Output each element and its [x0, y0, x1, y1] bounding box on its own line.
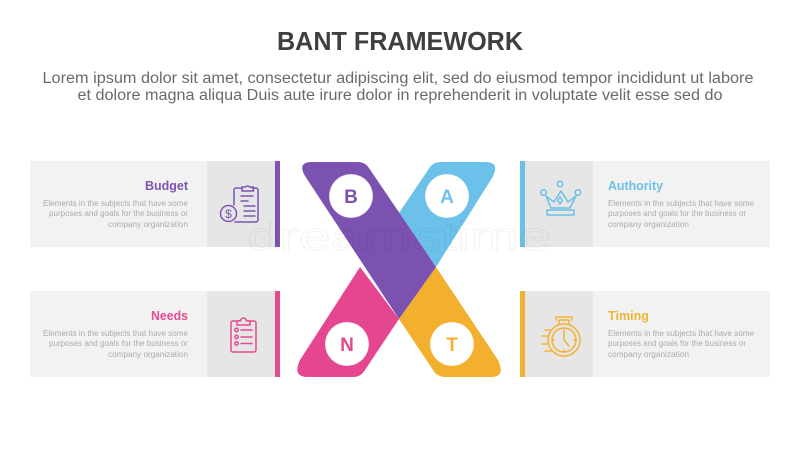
- badge: T: [430, 322, 474, 366]
- badge: B: B: [344, 187, 358, 208]
- subtitle text: Lorem ipsum dolor sit amet, consectetur adipiscing elit, sed do eiusmod tempor incididunt ut labore: [42, 70, 754, 87]
- icon: checklist clipboard: [231, 318, 256, 352]
- badge: T: T: [446, 335, 458, 356]
- badge: A: A: [440, 187, 454, 208]
- band: A blue: [399, 162, 495, 267]
- description: needs: Elements in the subjects that have some: [43, 328, 188, 338]
- description: timing: company organization: [608, 349, 689, 359]
- description: authority: company organization: [608, 219, 689, 229]
- description: needs: company organization: [108, 349, 188, 359]
- badge: A: [425, 174, 469, 218]
- heading: authority: Authority: [608, 179, 663, 193]
- panel: needs: [30, 291, 280, 377]
- description: timing: purposes and goals for the business or: [608, 338, 746, 348]
- band: T yellow: [399, 267, 501, 377]
- subtitle text: et dolore magna aliqua Duis aute irure dolor in reprehenderit in voluptate velit esse sed do: [78, 87, 722, 104]
- description: budget: Elements in the subjects that have some: [43, 198, 188, 208]
- watermark: dreamstime: [247, 215, 551, 259]
- description: authority: Elements in the subjects that have some: [608, 198, 754, 208]
- description: budget: [43, 198, 188, 229]
- icon: stopwatch: [542, 317, 580, 356]
- description: authority: purposes and goals for the business or: [608, 208, 746, 218]
- description: budget: company organization: [108, 219, 188, 229]
- icon: clipboard with dollar coin: [220, 186, 258, 222]
- badge: N: N: [340, 335, 354, 356]
- description: needs: purposes and goals for the business or: [49, 338, 188, 348]
- description: timing: Elements in the subjects that have some: [608, 328, 754, 338]
- heading: timing: Timing: [608, 309, 649, 323]
- badge: N: [325, 322, 369, 366]
- icon: clipboard with dollar coin: $: [225, 207, 232, 221]
- subtitle text: [42, 70, 754, 104]
- panel: timing: [520, 291, 770, 377]
- panel: authority: [520, 161, 770, 247]
- description: timing: [608, 328, 754, 359]
- band: B purple: [302, 162, 436, 319]
- heading: budget: Budget: [145, 179, 189, 193]
- X diagram: [297, 162, 501, 377]
- panel: budget: [30, 161, 280, 247]
- icon: crown: [541, 181, 581, 215]
- description: needs: [43, 328, 188, 359]
- band: N pink: [297, 267, 399, 377]
- badge: B: [329, 174, 373, 218]
- description: budget: purposes and goals for the business or: [49, 208, 188, 218]
- heading: needs: Needs: [151, 309, 188, 323]
- description: authority: [608, 198, 754, 229]
- title: BANT FRAMEWORK: [277, 28, 524, 56]
